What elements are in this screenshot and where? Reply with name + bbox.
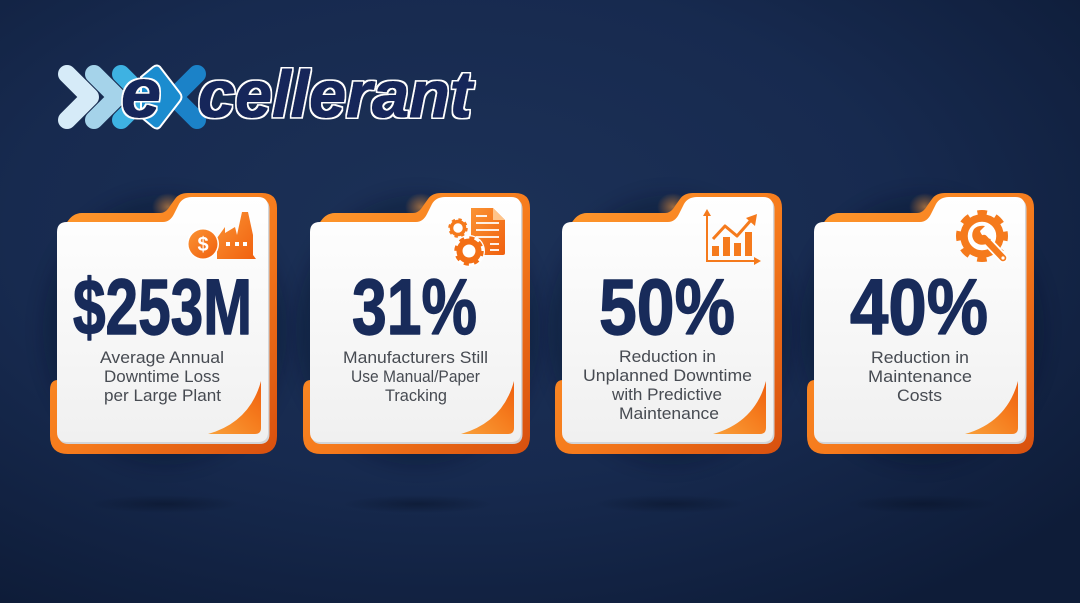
big number: 40% [850, 262, 988, 351]
description [583, 348, 752, 423]
big number: 50% [599, 262, 735, 351]
description [343, 349, 488, 405]
description: Unplanned Downtime [583, 367, 752, 385]
description: Downtime Loss [104, 368, 220, 386]
description: per Large Plant [104, 387, 221, 405]
big number: 31% [352, 262, 477, 351]
description: Maintenance [868, 368, 972, 386]
corner curl [208, 381, 261, 434]
description: Average Annual [100, 349, 224, 367]
icon: growth chart [703, 209, 761, 265]
description: Tracking [385, 387, 447, 405]
corner curl [965, 381, 1018, 434]
logo wordmark: cellerant [198, 57, 475, 131]
description [868, 349, 972, 405]
icon: coin and factory: $ [197, 234, 209, 256]
big number: $253M [73, 262, 252, 351]
corner curl [461, 381, 514, 434]
icon: gear and wrench [958, 212, 1006, 260]
icon: coin and factory [187, 212, 256, 260]
description: Maintenance [619, 405, 719, 423]
description: Costs [897, 387, 942, 405]
logo chevrons [67, 74, 197, 120]
corner curl [713, 381, 766, 434]
panel: downtime loss [43, 193, 287, 513]
description: with Predictive [611, 386, 722, 404]
panel: unplanned downtime [548, 193, 792, 513]
description [100, 349, 224, 405]
logo [67, 54, 475, 132]
description: Use Manual/Paper [351, 368, 480, 386]
description: Manufacturers Still [343, 349, 488, 367]
description: Reduction in [619, 348, 716, 366]
description: Reduction in [871, 349, 969, 367]
panel: maintenance costs [800, 193, 1044, 513]
logo letter e: e [121, 54, 161, 132]
panel: manual tracking [296, 193, 540, 513]
icon: document and gears [450, 208, 505, 267]
logo arrow diamond [141, 66, 182, 128]
